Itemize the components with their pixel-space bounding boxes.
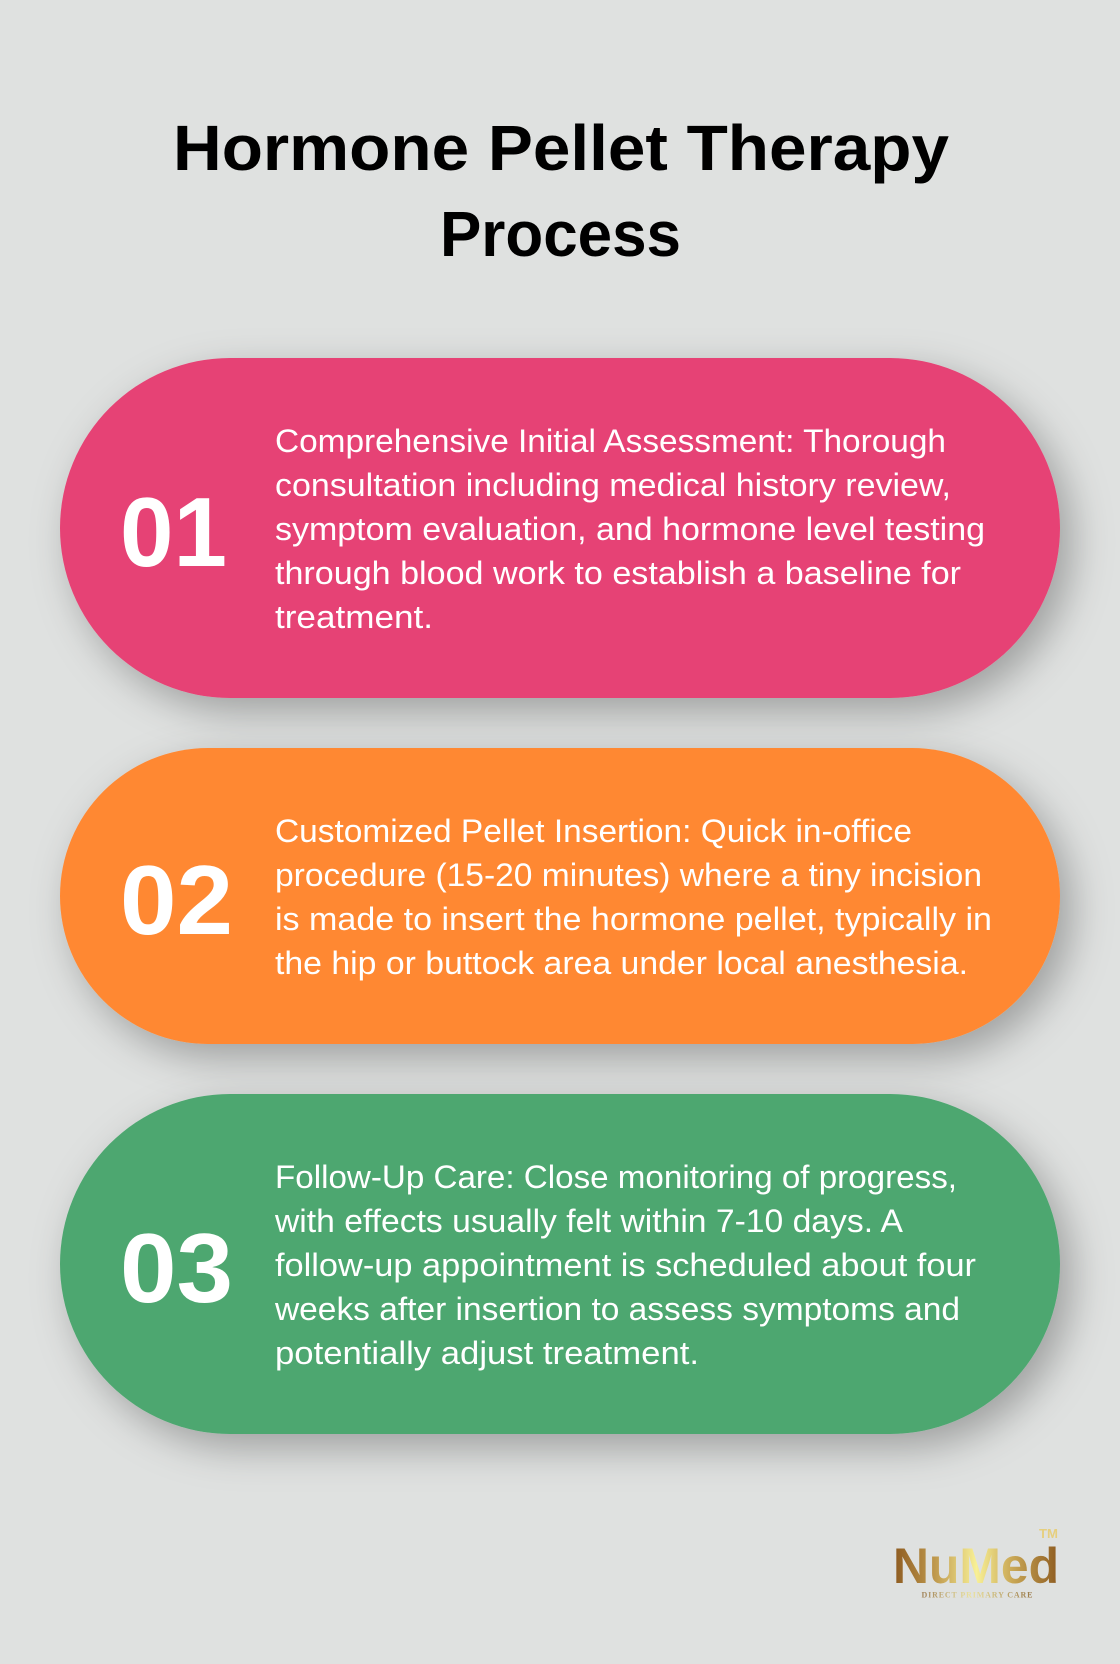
pill background orange [60,748,1060,1044]
title [173,112,949,270]
step 01 text: through blood work to establish a baseline for [275,555,961,591]
step 03 text: with effects usually felt within 7-10 days. A [274,1203,903,1239]
logo: NuMed: TM [1039,1527,1058,1541]
panel: step 01 [60,358,1060,698]
step 01 text [275,423,985,635]
step 03 text: follow-up appointment is scheduled about four [275,1247,976,1283]
number 01: 01 [120,477,227,587]
step 02 text: is made to insert the hormone pellet, typically in [275,901,992,937]
step 03 text [274,1159,976,1371]
step 01 text: treatment. [275,599,433,635]
step 03 text: weeks after insertion to assess symptoms and [274,1291,960,1327]
step 02 text: Customized Pellet Insertion: Quick in-office [275,813,912,849]
panel: step 03 [60,1094,1060,1434]
step 03 text: Follow-Up Care: Close monitoring of progress, [275,1159,957,1195]
pill background pink [60,358,1060,698]
step 01 text: consultation including medical history review, [275,467,951,503]
step 02 text [275,813,992,981]
number 03: 03 [120,1213,233,1323]
title: Process [440,198,681,270]
number 02: 02 [120,845,233,955]
pill background green [60,1094,1060,1434]
step 02 text: procedure (15-20 minutes) where a tiny incision [275,857,982,893]
step 01 text: Comprehensive Initial Assessment: Thorough [275,423,946,459]
step 01 text: symptom evaluation, and hormone level testing [275,511,985,547]
step 03 text: potentially adjust treatment. [275,1335,699,1371]
step 02 text: the hip or buttock area under local anesthesia. [275,945,968,981]
logo: NuMed: DIRECT PRIMARY CARE [922,1590,1032,1600]
title: Hormone Pellet Therapy [173,112,949,184]
logo: NuMed: NuMed [893,1538,1059,1594]
panel: step 02 [60,748,1060,1044]
